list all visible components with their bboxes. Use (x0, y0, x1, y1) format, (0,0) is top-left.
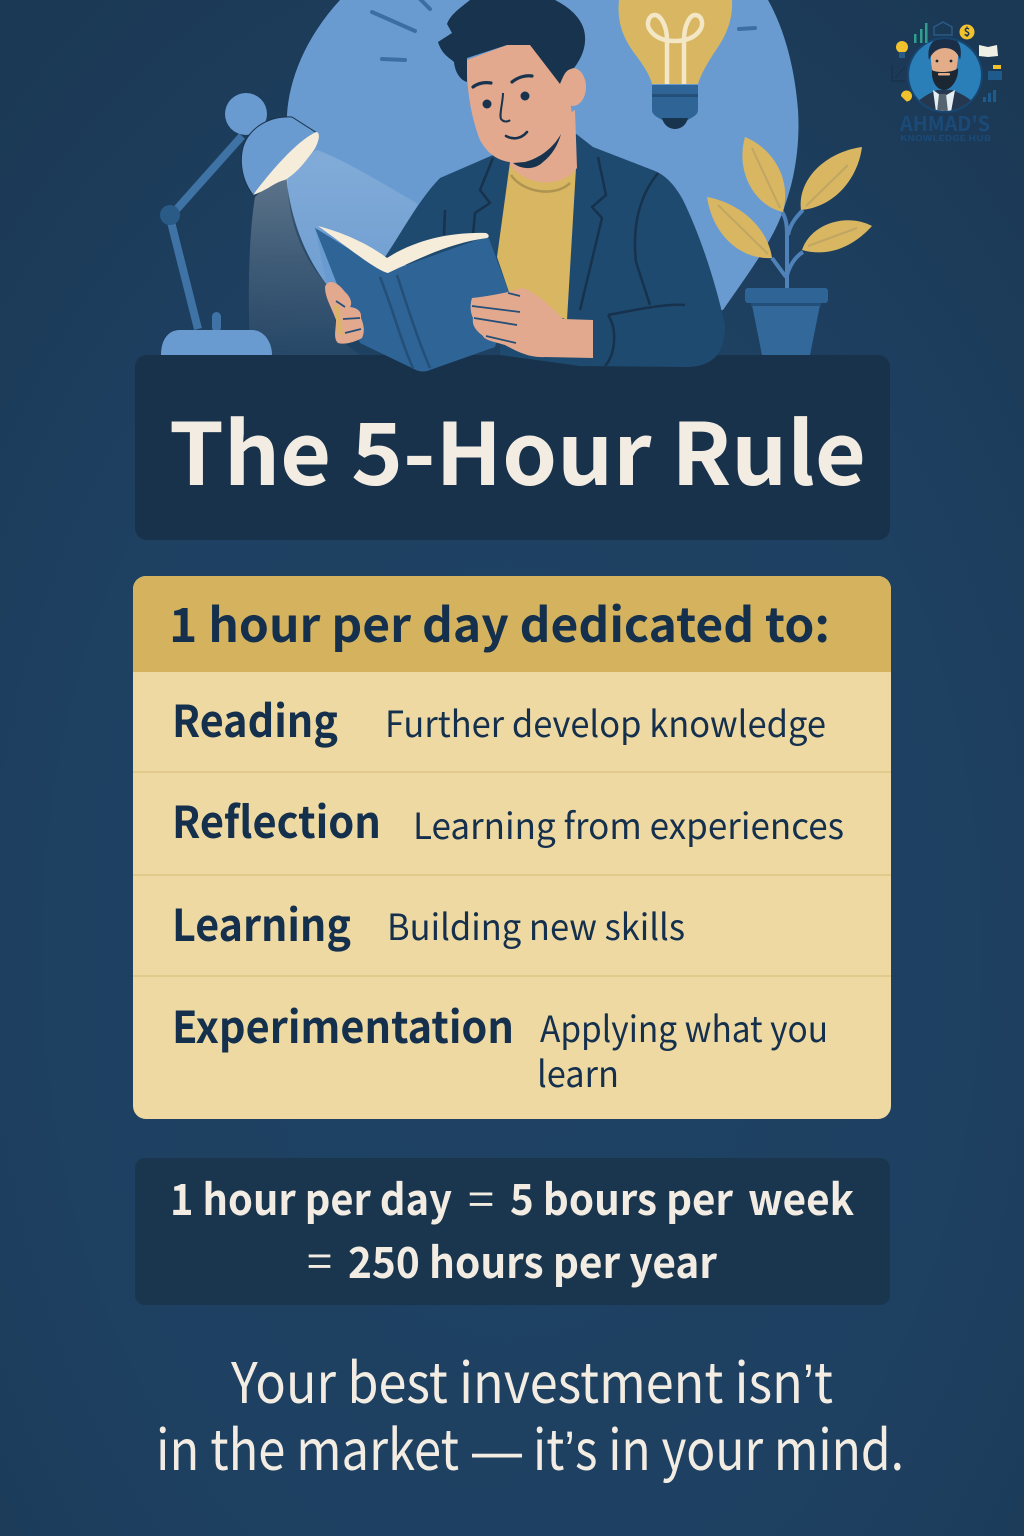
row: learning: Learning (172, 890, 351, 954)
lightbulb (619, 0, 732, 129)
calculation line 2: 250 hours per year (348, 1229, 717, 1291)
panel: hours calculation (135, 1158, 890, 1305)
desk lamp (160, 93, 418, 355)
closing quote: in the market (156, 1406, 459, 1487)
title: The 5-Hour Rule (169, 385, 866, 510)
row: reflection (172, 787, 844, 851)
calculation line 1: week (748, 1166, 854, 1228)
illustration: person reading with lamp, bulb and plant (160, 0, 872, 372)
row: experimentation: Experimentation (172, 992, 514, 1056)
idea rays (372, 0, 755, 60)
neck and face (510, 110, 577, 182)
calculation line 1: = (468, 1166, 494, 1228)
logo wordmark: KNOWLEDGE HUB (900, 133, 992, 144)
t-shirt (497, 162, 576, 320)
panel: daily habits table (133, 576, 891, 1119)
row: reflection: Learning from experiences (413, 798, 844, 850)
logo icons: $ (964, 24, 970, 40)
potted plant (707, 137, 872, 355)
table header (133, 576, 891, 672)
row: reading: Further develop knowledge (385, 696, 826, 748)
logo wordmark: AHMAD'S (899, 108, 990, 137)
closing quote: — (472, 1419, 522, 1482)
logo portrait (907, 37, 983, 113)
row: experimentation: Applying what you (540, 1001, 828, 1053)
logo: Ahmad's Knowledge Hub (892, 22, 1002, 144)
open book (315, 226, 510, 372)
closing quote (156, 1339, 904, 1487)
calculation line 1 (170, 1166, 854, 1228)
table header: 1 hour per day dedicated to: (169, 587, 830, 656)
right hand (471, 288, 593, 358)
row: reflection: Reflection (172, 787, 381, 851)
jacket seams (444, 157, 685, 366)
row: learning: Building new skills (387, 899, 685, 951)
row: learning (172, 890, 685, 954)
row: reading (172, 686, 826, 750)
jacket (385, 133, 725, 367)
light beam (249, 150, 418, 355)
closing quote: it’s in your mind. (533, 1406, 904, 1487)
calculation line 2: = (307, 1228, 332, 1290)
row: experimentation (172, 992, 828, 1098)
facial features (473, 76, 561, 168)
calculation line 1: 5 bours per (510, 1166, 733, 1228)
row: reading: Reading (172, 686, 338, 750)
left hand (325, 282, 364, 344)
background circle (285, 0, 798, 330)
row: experimentation: learn (537, 1046, 619, 1098)
closing quote: Your best investment isn’t (230, 1339, 833, 1420)
person (315, 0, 725, 372)
hair (438, 0, 585, 84)
panel: title banner (135, 355, 890, 540)
calculation line 1: 1 hour per day (170, 1166, 452, 1228)
